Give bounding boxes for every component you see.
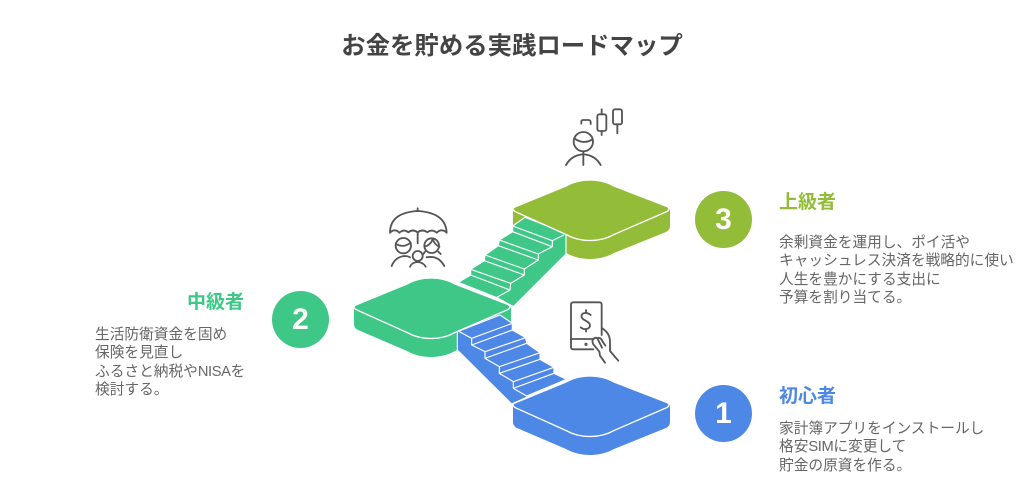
text: intermediate description: 生活防衛資金を固め (95, 327, 227, 343)
number badge 2: 2 (292, 303, 309, 336)
text: beginner description: 貯金の原資を作る。 (779, 458, 911, 474)
text: advanced description (779, 234, 1014, 306)
number badge 1 (695, 385, 752, 442)
number badge 3: 3 (715, 203, 732, 236)
heading: beginner: 初心者 (779, 386, 836, 407)
platform side: level 3 advanced (513, 209, 670, 259)
title: お金を貯める実践ロードマップ (341, 33, 683, 60)
number badge 1: 1 (715, 397, 732, 430)
text: advanced description: 人生を豊かにする支出に (779, 272, 941, 288)
text: intermediate description: 検討する。 (95, 382, 168, 398)
heading: advanced: 上級者 (779, 192, 836, 213)
text: beginner description: 家計簿アプリをインストールし (779, 421, 984, 437)
stairs: level 1 to level 2 (457, 315, 567, 404)
platform top: level 2 intermediate (354, 278, 510, 338)
icon: phone with dollar in hand (571, 302, 618, 363)
number badge 3 (695, 191, 752, 248)
text: advanced description: 予算を割り当てる。 (779, 290, 911, 306)
number badge 2 (272, 291, 329, 348)
heading: intermediate: 中級者 (187, 292, 244, 313)
platform side: level 2 intermediate (354, 307, 511, 357)
text: beginner description (779, 420, 984, 474)
text: intermediate description: 保険を見直し (95, 345, 183, 361)
icon: family under umbrella (390, 208, 447, 267)
platform: level 1 beginner (513, 376, 670, 455)
icon: investor with candlesticks (566, 109, 622, 165)
text: intermediate description: ふるさと納税やNISAを (95, 364, 245, 380)
stairs: level 2 to level 3 (458, 217, 566, 307)
text: intermediate description (95, 326, 245, 398)
text: beginner description: 格安SIMに変更して (779, 439, 906, 455)
text: advanced description: 余剰資金を運用し、ポイ活や (779, 235, 970, 251)
platform top: level 3 advanced (513, 180, 669, 240)
text: advanced description: キャッシュレス決済を戦略的に使い (779, 253, 1014, 269)
